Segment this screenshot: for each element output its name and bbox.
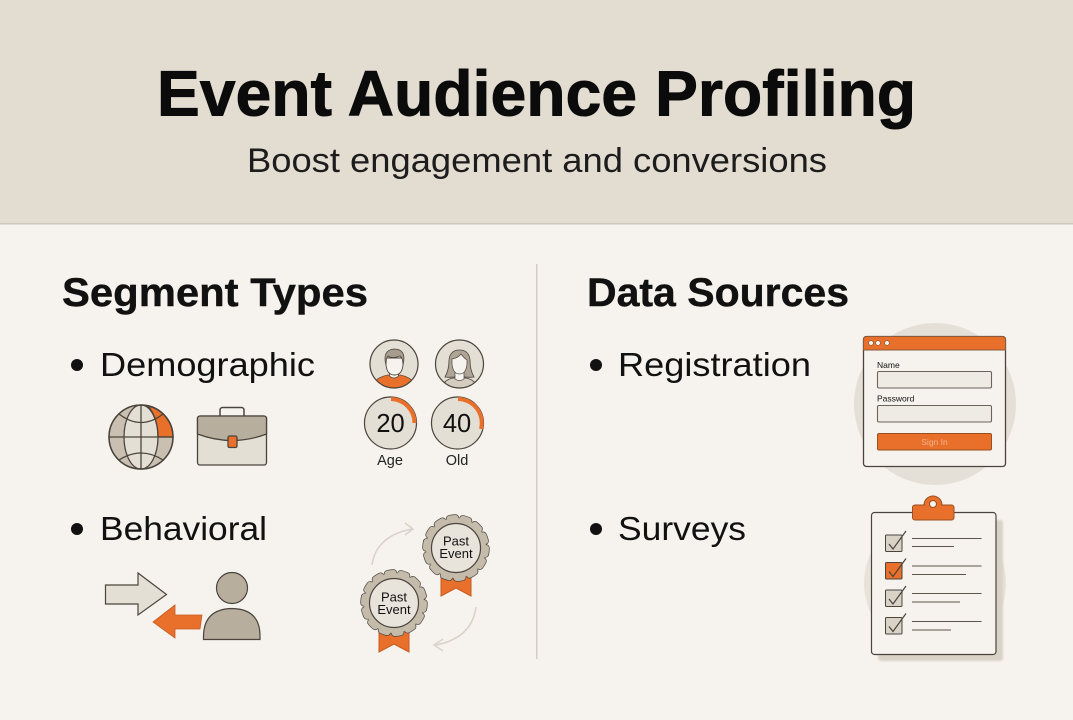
icon: globe [109, 405, 173, 469]
icon: registration form: Name [877, 360, 900, 370]
icon: inbound arrow [106, 573, 166, 615]
heading: segment types: Segment Types [62, 271, 368, 315]
panel: segment types [62, 271, 486, 652]
chart: old 40 ring [432, 397, 484, 469]
icon: person [204, 572, 260, 640]
header band [0, 0, 1073, 224]
bullet: surveys: Surveys [618, 511, 746, 548]
bullet: behavioral: Behavioral [100, 511, 267, 548]
chart: age 20 ring [364, 397, 416, 469]
icon: past event badge bottom: Event [377, 602, 411, 617]
icon: past event badge top: Event [439, 546, 473, 561]
icon: female avatar [436, 340, 484, 392]
icon: male avatar [370, 340, 418, 392]
arrow: cycle top [372, 523, 413, 565]
icon: registration form: Password [877, 394, 915, 404]
arrow: cycle bottom [434, 607, 476, 651]
title: Event Audience Profiling [157, 58, 916, 130]
icon: briefcase [198, 408, 266, 465]
chart: old 40 ring: 40 [443, 410, 471, 438]
icon: registration form: Sign In [921, 437, 948, 447]
icon: past event badge top [426, 518, 486, 596]
clipboard clip [912, 496, 954, 520]
icon: past event badge top: Past [443, 534, 469, 548]
icon: past event badge bottom [364, 573, 424, 652]
heading: data sources: Data Sources [587, 271, 849, 315]
icon: past event badge bottom: Past [381, 590, 407, 604]
chart: age 20 ring: 20 [376, 410, 405, 438]
icon: registration form [854, 323, 1016, 485]
subtitle: Boost engagement and conversions [247, 142, 827, 180]
chart: old 40 ring: Old [446, 453, 468, 469]
chart: age 20 ring: Age [377, 453, 403, 469]
bullet: demographic: Demographic [100, 347, 315, 384]
icon: outbound orange arrow [153, 605, 202, 638]
icon: survey clipboard [864, 496, 1006, 661]
panel: data sources [587, 271, 1016, 661]
bullet: registration: Registration [618, 347, 811, 384]
